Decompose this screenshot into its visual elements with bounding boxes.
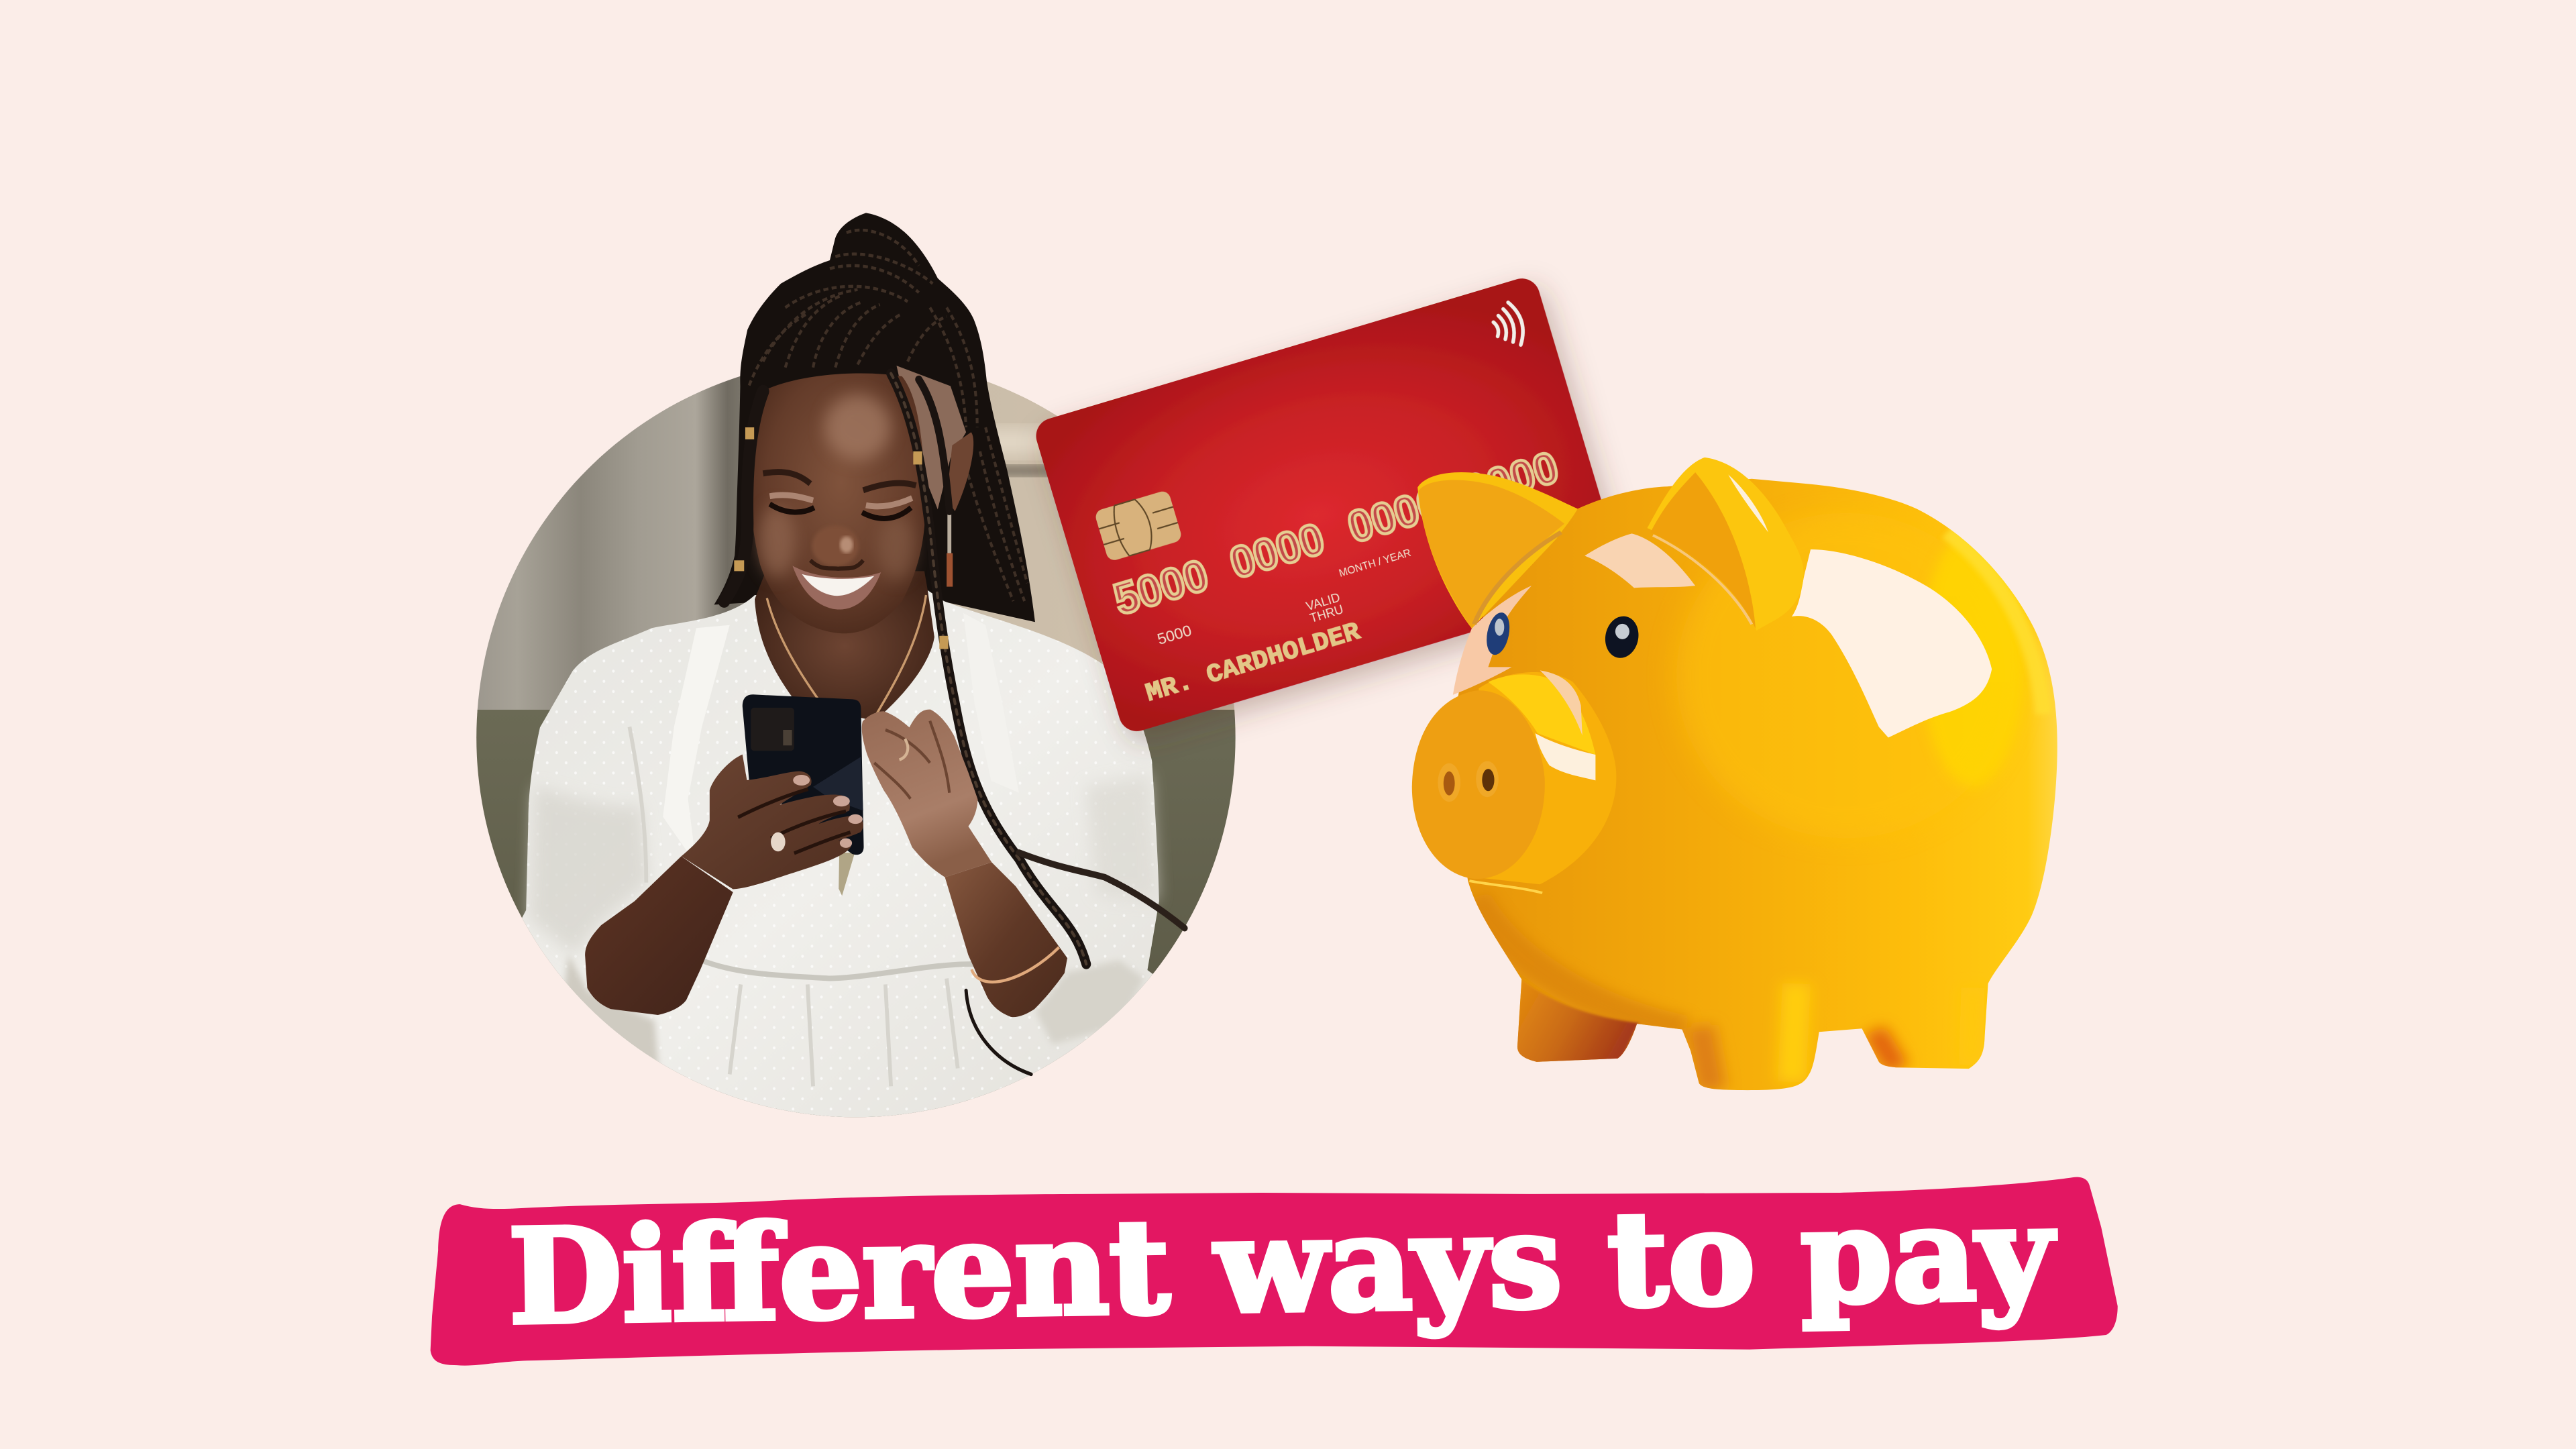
body shading [1474, 513, 2043, 1091]
left eye [1483, 611, 1513, 657]
room backdrop circle [476, 376, 1236, 1118]
necklace [767, 595, 926, 720]
card number [1108, 442, 1565, 625]
hair back and bun [714, 213, 1035, 622]
face and details [682, 366, 1185, 1074]
face [749, 373, 926, 633]
finger creases [738, 789, 851, 853]
forehead gloss [1585, 533, 1695, 588]
hair beads [734, 427, 949, 649]
contactless icon [1489, 301, 1528, 351]
nose [812, 526, 859, 566]
smile with teeth [792, 566, 881, 610]
credit card [1032, 274, 1627, 736]
large gloss highlight [1792, 549, 1992, 738]
cardholder name: MR. CARDHOLDER [1142, 618, 1364, 708]
middle leg shading [1700, 1026, 1712, 1091]
lace bands [663, 625, 730, 865]
fingernails and ring [793, 775, 863, 848]
title banner [431, 1176, 2118, 1366]
small card labels [1153, 547, 1422, 669]
nostrils [1438, 761, 1499, 802]
eyebrows [763, 472, 916, 490]
front hair braids [724, 374, 1185, 1074]
sleeve shading [529, 787, 649, 955]
right leg shading [1874, 1030, 1898, 1069]
left ear [1417, 472, 1578, 629]
small card labels: THRU [1308, 602, 1345, 625]
cuffs [563, 955, 659, 1068]
blouse folds [702, 961, 975, 979]
small card labels: 5000 [1155, 621, 1193, 648]
right eye [1603, 614, 1642, 660]
left leg [1517, 979, 1640, 1062]
piggy bank [1412, 458, 2057, 1091]
card number: 5000 [1108, 550, 1214, 625]
eyelid shine [769, 495, 912, 506]
banner brush shape [431, 1177, 2118, 1366]
chin crease [1469, 881, 1542, 893]
bracelet [971, 947, 1059, 982]
ear and earring [947, 432, 973, 511]
EMV chip [1094, 490, 1183, 562]
phone [743, 694, 864, 855]
photo: woman using a smartphone in a circle [460, 213, 1265, 1146]
body and legs [1450, 479, 2057, 1090]
card number: 0000 [1458, 442, 1564, 517]
card number: 0000 [1342, 478, 1448, 553]
title text: Different ways to pay [507, 1176, 2057, 1353]
blouse [522, 590, 1159, 1118]
left forearm [585, 856, 733, 1015]
snout tube [1469, 672, 1616, 884]
small card labels: MONTH / YEAR [1338, 547, 1412, 580]
small card labels: VALID [1304, 590, 1342, 613]
right ear [1648, 458, 1804, 631]
card body [1032, 274, 1627, 736]
right forearm [945, 862, 1067, 1017]
closed eyes [769, 504, 911, 519]
left cheek gloss [1453, 586, 1532, 695]
right hand pointing [862, 710, 991, 877]
scalp [896, 366, 966, 509]
forehead and cheek highlights [824, 394, 891, 460]
snout gloss [1536, 733, 1595, 780]
neck and chest [755, 571, 934, 721]
snout face [1412, 690, 1545, 879]
card number: 0000 [1224, 514, 1330, 589]
left hand holding phone [682, 755, 863, 890]
body, clipped to the circle [496, 571, 1175, 1146]
